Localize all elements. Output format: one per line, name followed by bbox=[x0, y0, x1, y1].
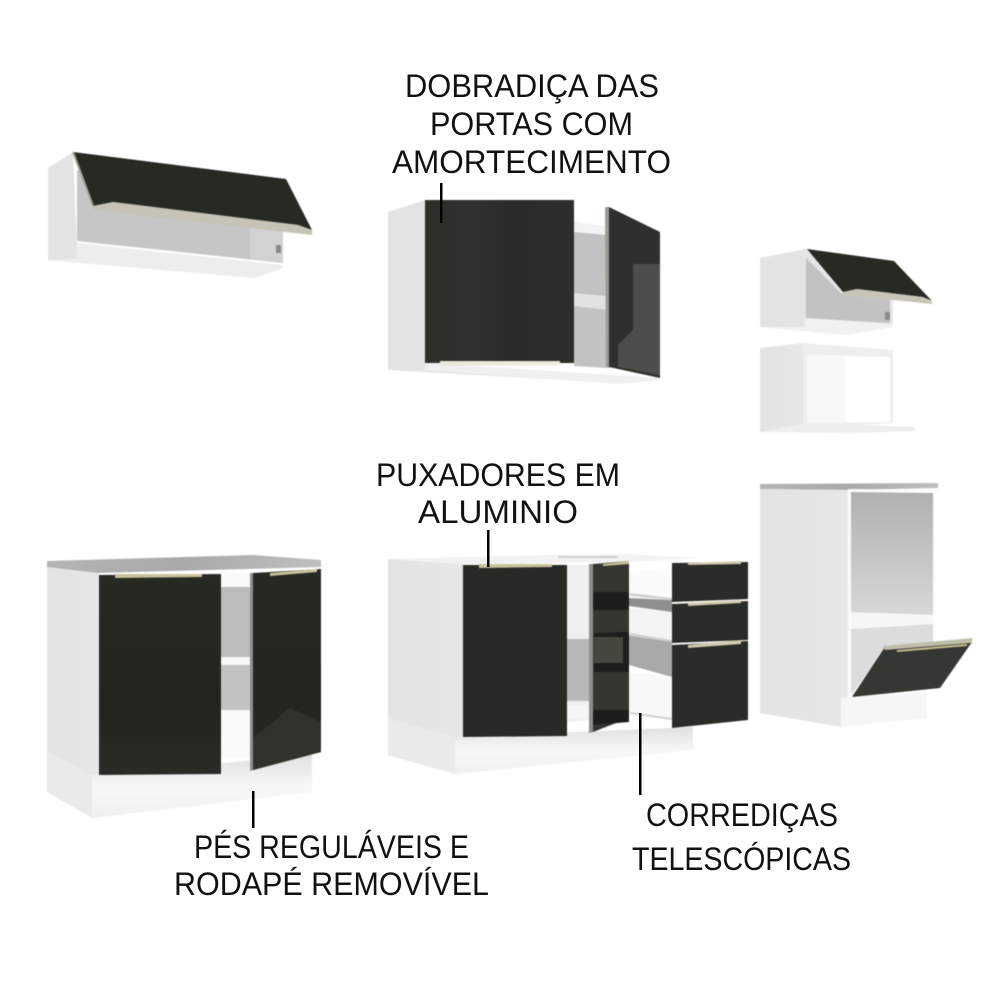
label: hinge: AMORTECIMENTO bbox=[392, 144, 671, 180]
left door bbox=[99, 574, 221, 775]
shelf bbox=[851, 612, 933, 628]
worktop bbox=[47, 555, 321, 573]
drawer box top bbox=[629, 568, 672, 600]
cabinet: tall oven tower with flap door bbox=[760, 483, 973, 727]
label: telescopic slides: CORREDIÇAS bbox=[646, 797, 838, 833]
plinth bbox=[455, 727, 693, 774]
plinth bbox=[92, 755, 312, 818]
tower plinth bbox=[841, 692, 927, 727]
leader line: hinge bbox=[440, 183, 442, 223]
cabinet: wall unit with lift-up door, top left bbox=[48, 152, 312, 278]
left handle bbox=[115, 574, 202, 578]
label: aluminium handles: PUXADORES EM bbox=[376, 457, 620, 493]
worktop bbox=[760, 483, 938, 490]
sink cutout bbox=[558, 556, 618, 558]
slide rails bbox=[630, 593, 672, 600]
cabinet: base unit with two doors, left bbox=[47, 555, 321, 818]
label: adjustable feet: PÉS REGULÁVEIS E bbox=[194, 829, 469, 865]
label: telescopic slides bbox=[632, 797, 851, 877]
door niche bbox=[567, 565, 590, 722]
label: adjustable feet: RODAPÉ REMOVÍVEL bbox=[174, 866, 489, 902]
leader line: feet bbox=[252, 791, 254, 828]
drawer fronts bbox=[672, 562, 748, 602]
label: hinge: PORTAS COM bbox=[430, 106, 633, 142]
left door bbox=[463, 565, 567, 737]
interior bbox=[221, 573, 251, 757]
lower niche bbox=[851, 624, 933, 695]
left handle bbox=[479, 564, 552, 568]
drawer box middle bbox=[629, 608, 672, 640]
open door bbox=[589, 564, 593, 733]
label: adjustable feet bbox=[174, 829, 489, 902]
cabinet: small wall unit with lift-up door, right bbox=[760, 249, 932, 335]
tower side bbox=[760, 489, 848, 727]
upper niche bbox=[851, 492, 933, 615]
label: hinge: DOBRADIÇA DAS bbox=[405, 68, 659, 104]
drawer box bottom bbox=[629, 672, 672, 718]
right reflection bbox=[253, 708, 321, 770]
flap handle bbox=[897, 644, 967, 652]
label: aluminium handles bbox=[376, 457, 620, 530]
cabinet: base unit with door and drawers, centre bbox=[388, 554, 748, 774]
drawer handles bbox=[688, 561, 741, 565]
right handle bbox=[270, 569, 317, 576]
leader line: handle bbox=[487, 530, 490, 567]
flap top edge bbox=[883, 638, 973, 650]
door edge bbox=[250, 573, 253, 771]
label: hinge bbox=[392, 68, 671, 180]
top surface bbox=[388, 554, 700, 564]
cabinet: open microwave niche, right bbox=[760, 343, 915, 433]
right door bbox=[253, 569, 321, 770]
flap door bbox=[852, 642, 972, 697]
leader line: slides bbox=[639, 713, 642, 795]
cabinet: wall unit with two doors, top centre bbox=[388, 200, 660, 384]
label: telescopic slides: TELESCÓPICAS bbox=[632, 841, 851, 877]
tower front frame bbox=[848, 489, 935, 697]
label: aluminium handles: ALUMINIO bbox=[418, 494, 578, 530]
